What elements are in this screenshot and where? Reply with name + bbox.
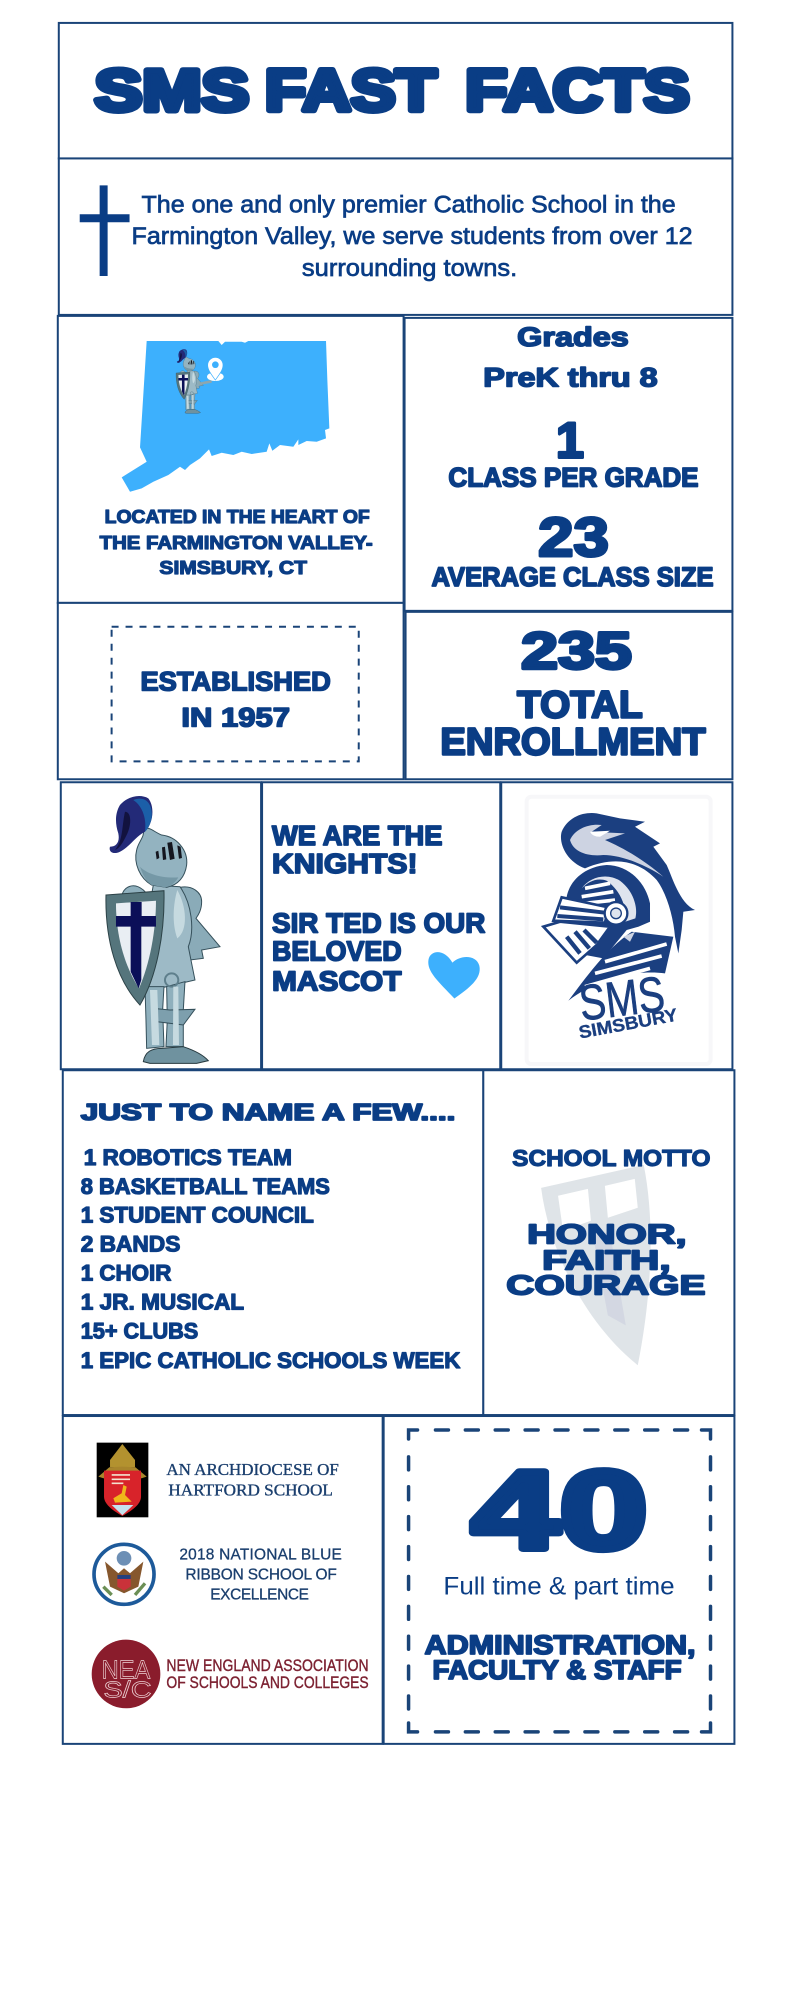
text: knights message: WE ARE THE bbox=[272, 820, 442, 851]
list: activities: 1 STUDENT COUNCIL bbox=[81, 1203, 314, 1228]
text: blue ribbon: 2018 NATIONAL BLUE bbox=[179, 1547, 342, 1564]
logo: SMS Simsbury helmet: SMS bbox=[576, 966, 668, 1032]
icon: heart bbox=[428, 952, 480, 998]
icon: shield watermark bbox=[541, 1165, 651, 1365]
text: knights message: SIR TED IS OUR bbox=[272, 908, 485, 939]
text: knights message bbox=[272, 820, 485, 997]
text: established in 1957: ESTABLISHED bbox=[141, 667, 331, 697]
list: activities: 2 BANDS bbox=[81, 1232, 180, 1257]
text: total enrollment: TOTAL bbox=[517, 684, 643, 726]
text: archdiocese bbox=[166, 1460, 339, 1500]
list: activities: 15+ CLUBS bbox=[81, 1318, 198, 1343]
text: location caption: SIMSBURY, CT bbox=[159, 557, 308, 578]
heading: just to name a few: JUST TO NAME A FEW.... bbox=[81, 1099, 455, 1125]
panel: school motto bbox=[483, 1070, 734, 1415]
panel: established bbox=[58, 603, 404, 779]
heading: SMS FAST FACTS: SMS bbox=[95, 59, 249, 124]
text: intro statement bbox=[132, 191, 693, 282]
text: blue ribbon bbox=[179, 1547, 342, 1603]
text: honor faith courage: HONOR, bbox=[527, 1219, 687, 1250]
panel: grades and class size bbox=[405, 318, 732, 611]
stat: average class size bbox=[431, 506, 713, 592]
logo: SMS Simsbury helmet bbox=[527, 797, 711, 1064]
heading: SMS FAST FACTS: FAST bbox=[265, 59, 437, 124]
stat: average class size: AVERAGE CLASS SIZE bbox=[431, 562, 713, 592]
list: activities: 8 BASKETBALL TEAMS bbox=[81, 1174, 330, 1199]
text: intro statement: Farmington Valley, we serve students from over 12 bbox=[132, 223, 693, 250]
text: honor faith courage: COURAGE bbox=[506, 1269, 706, 1300]
text: total enrollment bbox=[440, 684, 706, 763]
text: administration faculty and staff bbox=[425, 1630, 696, 1685]
list: activities bbox=[81, 1145, 461, 1373]
text: administration faculty and staff: ADMINISTRATION, bbox=[425, 1630, 696, 1660]
logo: NEASC circle: S/C bbox=[103, 1676, 152, 1702]
stat: average class size: 23 bbox=[538, 506, 609, 568]
text: archdiocese: AN ARCHDIOCESE OF bbox=[166, 1460, 339, 1479]
panel: location bbox=[58, 316, 404, 603]
list: activities: 1 ROBOTICS TEAM bbox=[84, 1145, 292, 1170]
text: knights message: MASCOT bbox=[272, 966, 402, 997]
text: location caption: THE FARMINGTON VALLEY- bbox=[100, 532, 373, 553]
icon: knight bbox=[106, 796, 220, 1063]
text: location caption bbox=[100, 506, 373, 578]
logo: archdiocese crest bbox=[97, 1443, 148, 1517]
text: established in 1957: IN 1957 bbox=[181, 702, 290, 732]
panel: we are the knights bbox=[262, 782, 500, 1069]
map: Connecticut bbox=[122, 341, 329, 492]
stat: class per grade: 1 bbox=[556, 412, 584, 468]
list: activities: 1 JR. MUSICAL bbox=[81, 1289, 244, 1314]
icon: location pin bbox=[198, 357, 224, 385]
text: blue ribbon: RIBBON SCHOOL OF bbox=[185, 1566, 337, 1583]
panel: affiliations bbox=[63, 1416, 383, 1744]
infographic bbox=[58, 23, 734, 1744]
text: administration faculty and staff: FACULTY & STAFF bbox=[432, 1655, 682, 1685]
panel: knight mascot image bbox=[61, 782, 261, 1069]
panel: title bbox=[59, 23, 732, 158]
text: intro statement: The one and only premier Catholic School in the bbox=[142, 191, 676, 218]
text: NEASC: OF SCHOOLS AND COLLEGES bbox=[166, 1673, 369, 1692]
icon: small knight on map bbox=[176, 349, 203, 413]
text: grades bbox=[483, 322, 658, 393]
stat: class per grade bbox=[448, 412, 699, 492]
list: activities: 1 CHOIR bbox=[81, 1261, 172, 1286]
text: total enrollment: ENROLLMENT bbox=[440, 721, 706, 763]
text: school motto label: SCHOOL MOTTO bbox=[512, 1145, 711, 1171]
panel: SMS logo bbox=[501, 782, 732, 1069]
logo: blue ribbon seal bbox=[94, 1544, 154, 1604]
logo: NEASC circle bbox=[92, 1640, 160, 1708]
stat: class per grade: CLASS PER GRADE bbox=[448, 462, 699, 492]
text: full time and part time: Full time & part time bbox=[443, 1572, 675, 1600]
text: NEASC bbox=[166, 1656, 369, 1692]
text: knights message: KNIGHTS! bbox=[272, 848, 418, 879]
text: knights message: BELOVED bbox=[272, 936, 402, 967]
heading: SMS FAST FACTS bbox=[95, 59, 690, 124]
text: grades: PreK thru 8 bbox=[483, 363, 658, 393]
text: blue ribbon: EXCELLENCE bbox=[210, 1586, 309, 1603]
stat: 40: 40 bbox=[471, 1448, 648, 1573]
panel: activities bbox=[63, 1070, 483, 1415]
dashed frame bbox=[409, 1430, 711, 1732]
text: grades: Grades bbox=[517, 322, 629, 352]
heading: SMS FAST FACTS: FACTS bbox=[465, 59, 690, 124]
text: intro statement: surrounding towns. bbox=[302, 255, 517, 282]
stat: 235: 235 bbox=[521, 622, 632, 680]
dashed frame bbox=[112, 627, 359, 761]
panel: intro bbox=[59, 158, 732, 315]
text: NEASC: NEW ENGLAND ASSOCIATION bbox=[166, 1656, 369, 1675]
panel: total enrollment bbox=[406, 612, 732, 779]
logo: SMS Simsbury helmet: SIMSBURY bbox=[577, 1005, 679, 1043]
logo: NEASC circle: NEA bbox=[102, 1654, 151, 1684]
text: location caption: LOCATED IN THE HEART OF bbox=[105, 506, 370, 527]
icon: cross bbox=[80, 185, 130, 276]
list: activities: 1 EPIC CATHOLIC SCHOOLS WEEK bbox=[81, 1348, 461, 1373]
text: honor faith courage bbox=[506, 1219, 706, 1300]
text: established in 1957 bbox=[141, 667, 331, 732]
text: honor faith courage: FAITH, bbox=[542, 1245, 671, 1276]
text: archdiocese: HARTFORD SCHOOL bbox=[168, 1481, 333, 1500]
panel: staff bbox=[384, 1416, 734, 1744]
